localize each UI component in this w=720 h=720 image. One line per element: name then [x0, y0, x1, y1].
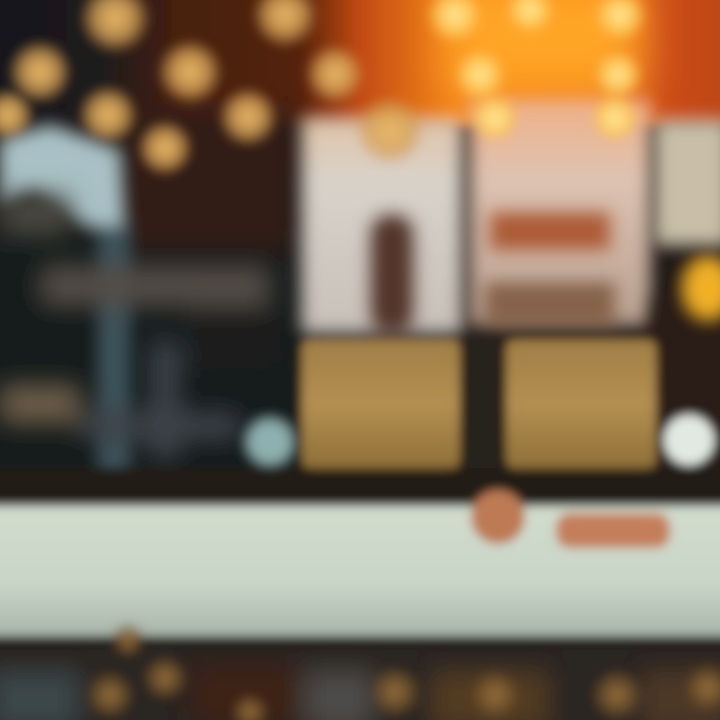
pale round light left [246, 418, 294, 466]
left dark section [0, 110, 305, 495]
tan box right [506, 340, 656, 468]
lower dark strip [0, 645, 720, 720]
left window pale blue [0, 125, 130, 475]
pale counter top [0, 506, 720, 636]
orange glow [450, 0, 640, 90]
lower bokeh lights [84, 622, 720, 720]
upper bokeh lights [0, 0, 426, 176]
orange brown band [485, 212, 615, 326]
upper wall gradient [0, 0, 720, 125]
bright bulbs [425, 0, 648, 144]
dark door shape [370, 214, 414, 334]
yellow light right [682, 256, 720, 320]
counter shadow band [0, 468, 720, 506]
dark gap between boxes [466, 335, 500, 485]
copper objects on counter [471, 490, 670, 548]
tan box left [302, 340, 460, 468]
left shelf streaks [0, 195, 280, 460]
pink right wall [470, 100, 650, 325]
far right pale wall [650, 120, 720, 470]
lower strip colour patches [0, 665, 720, 720]
white round light right [664, 415, 714, 465]
white centre wall [302, 118, 462, 333]
